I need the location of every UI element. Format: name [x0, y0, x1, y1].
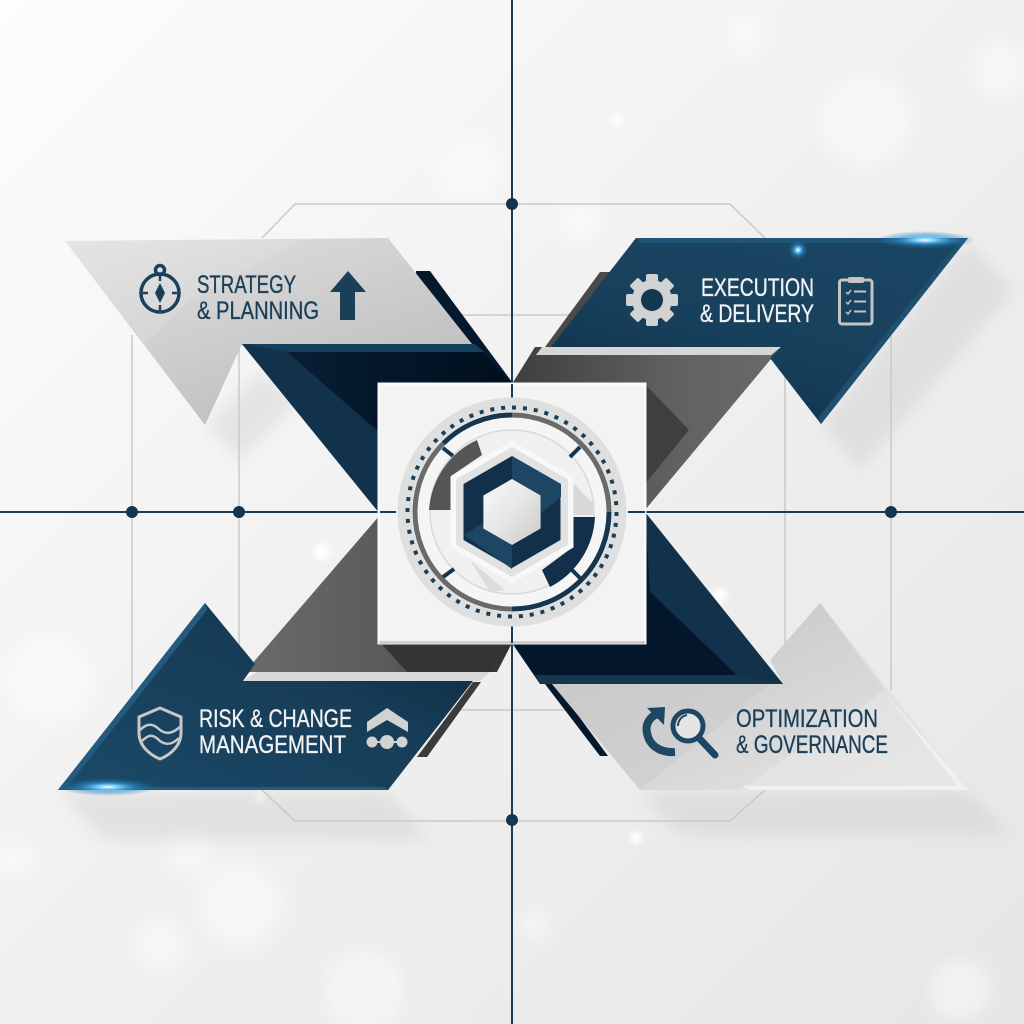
- heading: execution and delivery: & DELIVERY: [700, 300, 814, 328]
- hexagon: [450, 441, 574, 583]
- panel shadows: [58, 240, 1015, 840]
- panel: optimization and governance: [552, 603, 968, 790]
- icon: shield: [139, 708, 181, 759]
- emblem: [398, 398, 626, 626]
- dark wedge: bottom left: [243, 515, 512, 757]
- icon: refresh and magnifier: [647, 707, 715, 755]
- center panel: [379, 384, 645, 644]
- icon: compass: [141, 266, 179, 312]
- heading: strategy and planning: & PLANNING: [197, 297, 319, 325]
- heading: optimization and governance: OPTIMIZATION: [736, 705, 878, 733]
- heading: strategy and planning: STRATEGY: [197, 271, 296, 299]
- panel: risk and change management: [58, 603, 473, 796]
- grid nodes: [126, 198, 897, 826]
- dark wedge: bottom right: [512, 512, 783, 756]
- dark wedge: top right: [512, 272, 781, 520]
- icon: clipboard: [840, 277, 872, 324]
- icon: gear: [626, 274, 678, 326]
- heading: optimization and governance: & GOVERNANCE: [736, 731, 888, 759]
- panel: strategy and planning: [65, 238, 472, 425]
- heading: risk and change management: MANAGEMENT: [199, 731, 346, 759]
- icon: up arrow: [330, 271, 366, 320]
- icon: chevron and nodes: [366, 708, 408, 749]
- dark wedge: top left: [242, 271, 512, 520]
- heading: execution and delivery: EXECUTION: [701, 274, 814, 302]
- heading: risk and change management: RISK & CHANGE: [199, 705, 352, 733]
- panel: execution and delivery: [551, 231, 975, 424]
